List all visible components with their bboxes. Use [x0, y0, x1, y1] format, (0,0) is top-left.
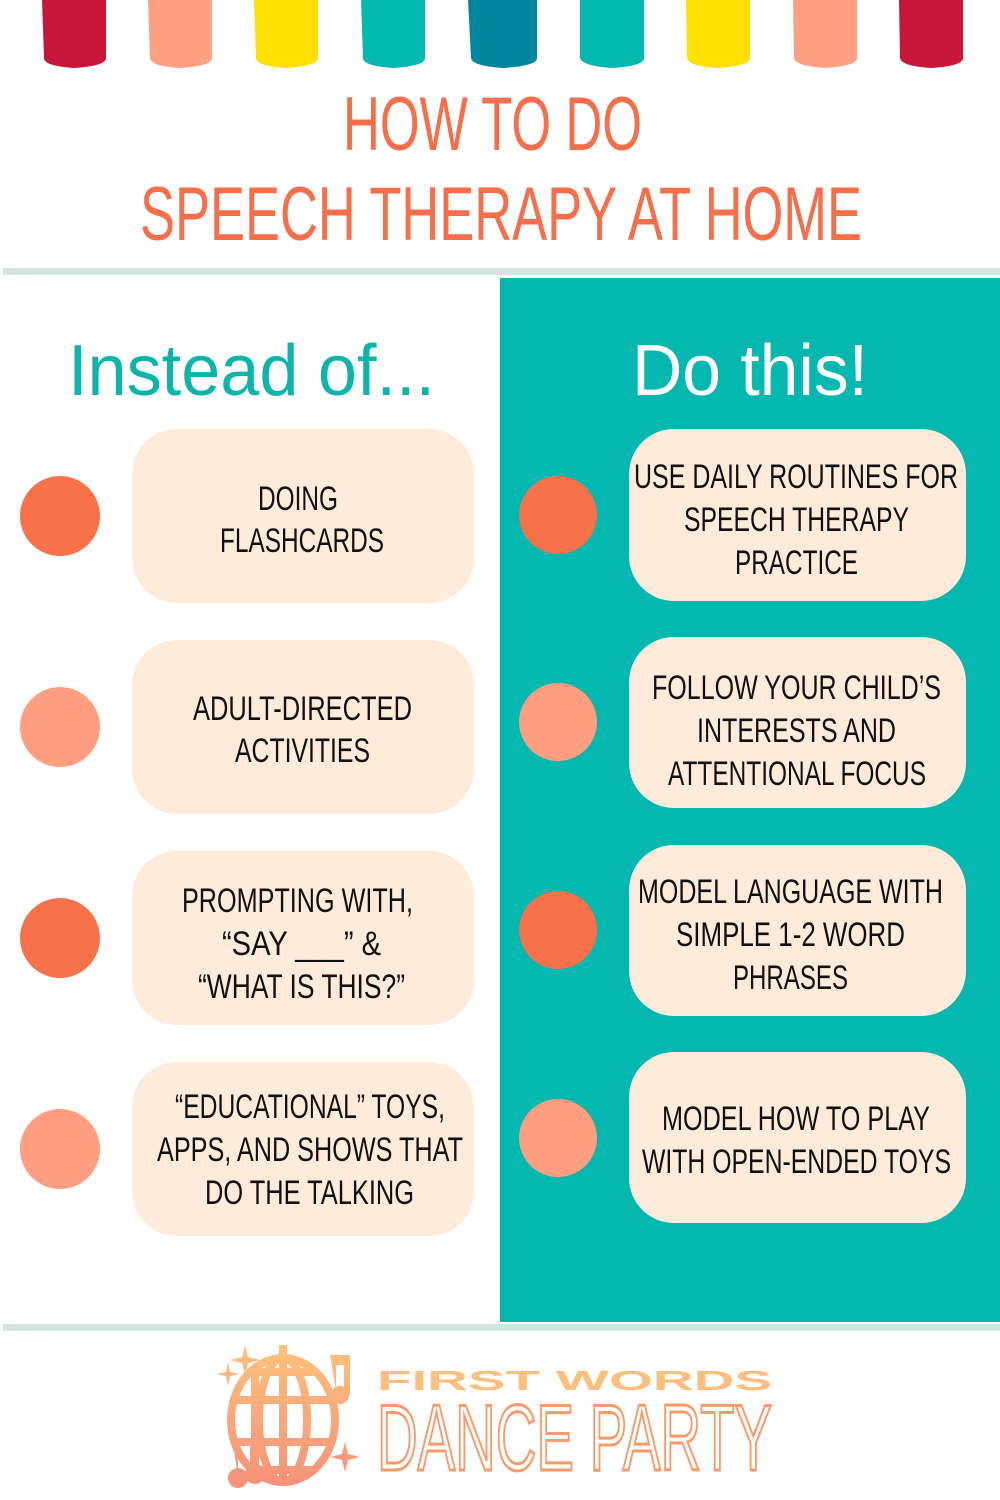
text: first words: FIRST WORDS	[377, 1365, 772, 1396]
heading: do this: Do this!	[632, 331, 868, 411]
banner tabs	[42, 0, 963, 68]
item: model language: SIMPLE 1-2 WORD	[676, 916, 905, 954]
item: follow interests	[519, 637, 966, 808]
panel: instead of list	[20, 429, 474, 1236]
panel: do this background	[500, 278, 1000, 1322]
item: prompting: PROMPTING WITH,	[182, 882, 413, 920]
item: model language: PHRASES	[733, 959, 848, 997]
item: prompting: “WHAT IS THIS?”	[198, 968, 405, 1006]
item: model play	[519, 1052, 966, 1223]
item: daily routines: SPEECH THERAPY	[684, 501, 909, 539]
item: adult-directed: ADULT-DIRECTED	[193, 690, 412, 728]
panel: do this list	[519, 429, 966, 1223]
item: flashcards: FLASHCARDS	[220, 522, 384, 560]
item: follow interests: INTERESTS AND	[697, 712, 896, 750]
item: adult-directed	[20, 640, 474, 814]
heading: instead of: Instead of...	[68, 331, 435, 411]
item: model language	[519, 845, 966, 1016]
item: adult-directed: ACTIVITIES	[235, 732, 370, 770]
logo	[216, 1345, 772, 1490]
item: educational toys: “EDUCATIONAL” TOYS,	[175, 1088, 445, 1126]
item: prompting: “SAY ___” &	[222, 925, 381, 963]
item: educational toys: DO THE TALKING	[205, 1174, 414, 1212]
item: flashcards: DOING	[258, 480, 338, 518]
title	[140, 82, 862, 257]
item: educational toys: APPS, AND SHOWS THAT	[157, 1131, 463, 1169]
item: daily routines	[519, 429, 966, 601]
item: prompting	[20, 851, 474, 1025]
icon: disco globe	[216, 1345, 360, 1488]
title: HOW TO DO	[343, 82, 642, 167]
item: daily routines: PRACTICE	[735, 544, 858, 582]
item: educational toys	[20, 1062, 474, 1236]
item: flashcards	[20, 429, 474, 603]
